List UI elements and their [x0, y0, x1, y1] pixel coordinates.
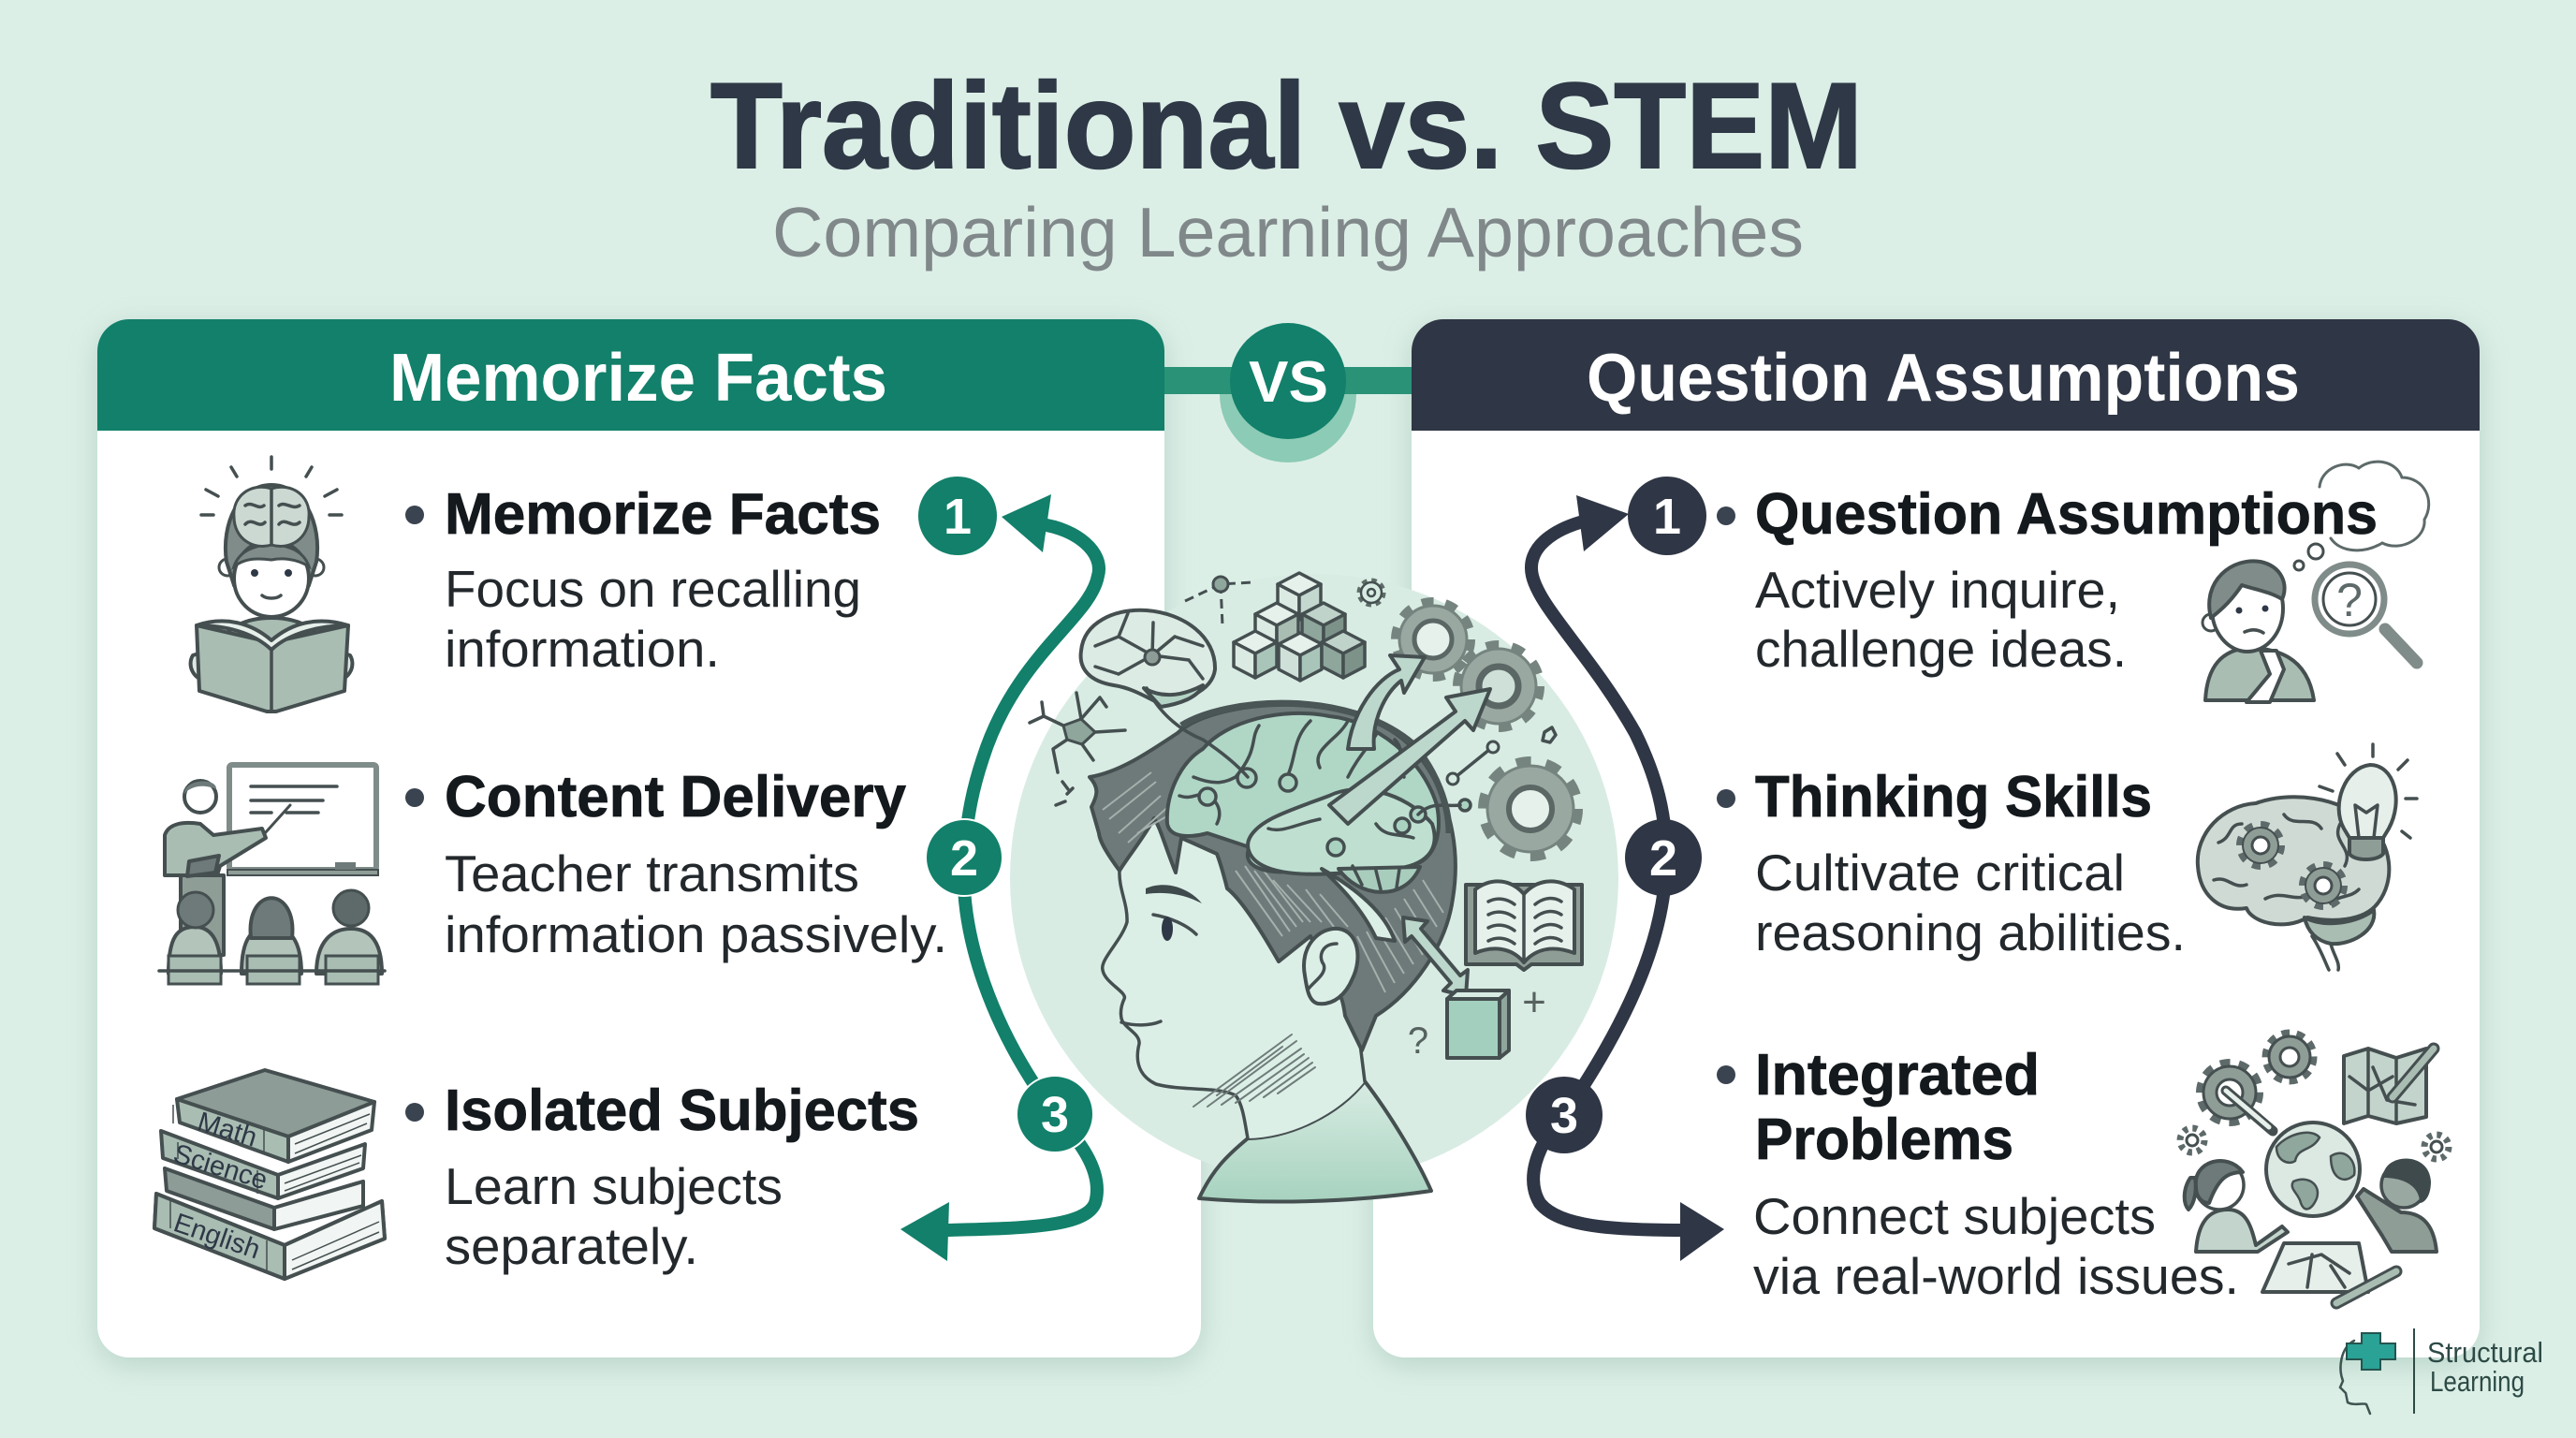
step 3 right — [1526, 1077, 1603, 1153]
subtitle: Comparing Learning Approaches — [772, 193, 1804, 271]
text block: isolated subjects: separately. — [445, 1217, 698, 1275]
gear middle — [1459, 647, 1538, 726]
curved arrow up — [1348, 655, 1425, 749]
brain — [1167, 713, 1439, 872]
arrowhead bottom — [1680, 1202, 1724, 1261]
boy — [2357, 1189, 2437, 1252]
double arrow — [1403, 917, 1468, 996]
icon: questioning student — [2203, 544, 2417, 702]
left arrow path — [900, 494, 1099, 1261]
text block: question assumptions: Question Assumptions — [1755, 482, 2378, 547]
book label: math: Math — [194, 1107, 260, 1153]
text block: question assumptions: Actively inquire, — [1755, 561, 2120, 619]
step 1 right: 1 — [1653, 489, 1681, 545]
panel heading: Question Assumptions — [1587, 341, 2300, 416]
book label: science: Science — [169, 1139, 271, 1196]
gear left — [2202, 1064, 2258, 1121]
gear upper — [2267, 1034, 2312, 1079]
panel: question assumptions — [1373, 319, 2480, 1357]
panel heading: Memorize Facts — [389, 341, 887, 416]
small gears — [2180, 1128, 2204, 1152]
gear top — [1398, 604, 1469, 675]
text block: memorize facts: information. — [445, 620, 720, 678]
center illustration: student head with brain — [1090, 703, 1471, 1202]
logo plus mark — [2347, 1333, 2395, 1370]
straight arrow up — [1329, 689, 1490, 824]
step 2 left — [926, 819, 1003, 896]
text block: thinking skills: Cultivate critical — [1755, 844, 2125, 902]
brain stem — [1322, 869, 1395, 941]
text block: memorize facts — [405, 482, 881, 678]
text block: question assumptions — [1717, 482, 2378, 678]
neck shading — [1193, 1034, 1315, 1107]
step 2 right — [1625, 819, 1702, 896]
girl — [2196, 1210, 2288, 1252]
vs badge: VS — [1249, 350, 1328, 415]
panel body — [97, 319, 1201, 1357]
text block: question assumptions: challenge ideas. — [1755, 620, 2127, 678]
panel: memorize facts — [97, 319, 1201, 1357]
title: Traditional vs. STEM — [710, 57, 1863, 194]
hair strands — [1103, 772, 1443, 992]
panel header bar — [1412, 319, 2480, 431]
brain folds — [1179, 721, 1413, 889]
eye and brow — [1121, 885, 1202, 1025]
inner ear — [1309, 944, 1337, 989]
step 2 right: 2 — [1649, 830, 1677, 887]
dashes near neuron — [1056, 782, 1073, 805]
step 1 right — [1628, 477, 1706, 555]
central circle backdrop — [1010, 574, 1618, 1182]
skull band — [1181, 703, 1449, 833]
book label: english: English — [169, 1208, 264, 1266]
panel body — [1373, 319, 2480, 1357]
text block: content delivery: Teacher transmits — [445, 844, 859, 902]
arrowhead bottom — [900, 1202, 949, 1261]
logo divider — [2413, 1328, 2415, 1414]
logo text second line: Learning — [2430, 1365, 2525, 1398]
step 2 left: 2 — [950, 830, 978, 887]
vs badge — [1164, 323, 1412, 462]
dashed node cluster — [1185, 577, 1252, 625]
panel header bar — [97, 319, 1164, 431]
text block: content delivery: Content Delivery — [445, 765, 907, 829]
text block: integrated problems: Connect subjects — [1753, 1187, 2156, 1245]
text block: isolated subjects: Isolated Subjects — [445, 1078, 919, 1143]
open book — [1466, 881, 1582, 970]
tiny mark — [1543, 727, 1556, 742]
plus sign: + — [1522, 979, 1546, 1025]
logo head outline — [2340, 1341, 2370, 1414]
step 3 right: 3 — [1550, 1088, 1578, 1144]
text block: thinking skills: reasoning abilities. — [1755, 903, 2186, 961]
cube pyramid — [1234, 573, 1365, 681]
logo text: Structural — [2427, 1336, 2543, 1369]
step 1 left — [918, 477, 997, 555]
text block: memorize facts: Memorize Facts — [445, 482, 881, 547]
text block: integrated problems: via real-world issues. — [1753, 1247, 2239, 1305]
text block: thinking skills — [1717, 765, 2186, 961]
text block: memorize facts: Focus on recalling — [445, 560, 861, 618]
brain nodes — [1199, 769, 1471, 856]
floating brain — [1081, 610, 1248, 777]
text block: isolated subjects — [405, 1078, 919, 1275]
temporal lobe — [1248, 789, 1435, 874]
step 3 left: 3 — [1041, 1087, 1069, 1143]
step 3 left — [1017, 1076, 1093, 1152]
logo: structural learning — [2340, 1328, 2543, 1414]
text block: integrated problems: Integrated — [1755, 1043, 2040, 1108]
map on table — [2262, 1243, 2368, 1292]
small cube — [1447, 990, 1509, 1058]
node lead — [1418, 805, 1460, 814]
arrowhead top — [1576, 495, 1629, 551]
globe — [2266, 1123, 2360, 1216]
text block: integrated problems: Problems — [1755, 1108, 2013, 1172]
cloud behind heading — [2320, 462, 2429, 550]
text block: isolated subjects: Learn subjects — [445, 1157, 783, 1215]
face profile line — [1103, 871, 1365, 1138]
neuron — [1030, 693, 1125, 772]
icon: teacher and classroom — [159, 765, 385, 984]
step 1 left: 1 — [944, 489, 972, 545]
pencil lower — [2336, 1271, 2396, 1303]
node link — [1447, 741, 1499, 785]
cerebellum and stem — [1339, 867, 1420, 892]
icon: brain with gears and lightbulb — [2198, 744, 2417, 970]
face — [1103, 735, 1404, 1138]
ear — [1304, 929, 1357, 1004]
gear lower — [1486, 764, 1575, 854]
arrowhead top — [1002, 494, 1051, 552]
icon: questioning student: ? — [2336, 574, 2363, 626]
icon: stack of subject books — [154, 1070, 385, 1279]
text block: integrated problems — [1717, 1043, 2239, 1305]
text block: content delivery — [405, 765, 947, 963]
pencil — [2226, 1091, 2273, 1131]
right arrow path — [1531, 495, 1724, 1261]
folded map — [2344, 1049, 2426, 1123]
small gear — [1360, 581, 1383, 604]
text block: content delivery: information passively. — [445, 905, 947, 963]
shirt — [1199, 1081, 1431, 1202]
icon: integrated problem solving — [2180, 1034, 2449, 1303]
text block: thinking skills: Thinking Skills — [1755, 765, 2152, 829]
panel shadows — [97, 327, 2480, 1365]
hair — [1090, 705, 1456, 1050]
question mark: ? — [1408, 1020, 1428, 1062]
icon: boy reading with brain — [191, 457, 352, 712]
